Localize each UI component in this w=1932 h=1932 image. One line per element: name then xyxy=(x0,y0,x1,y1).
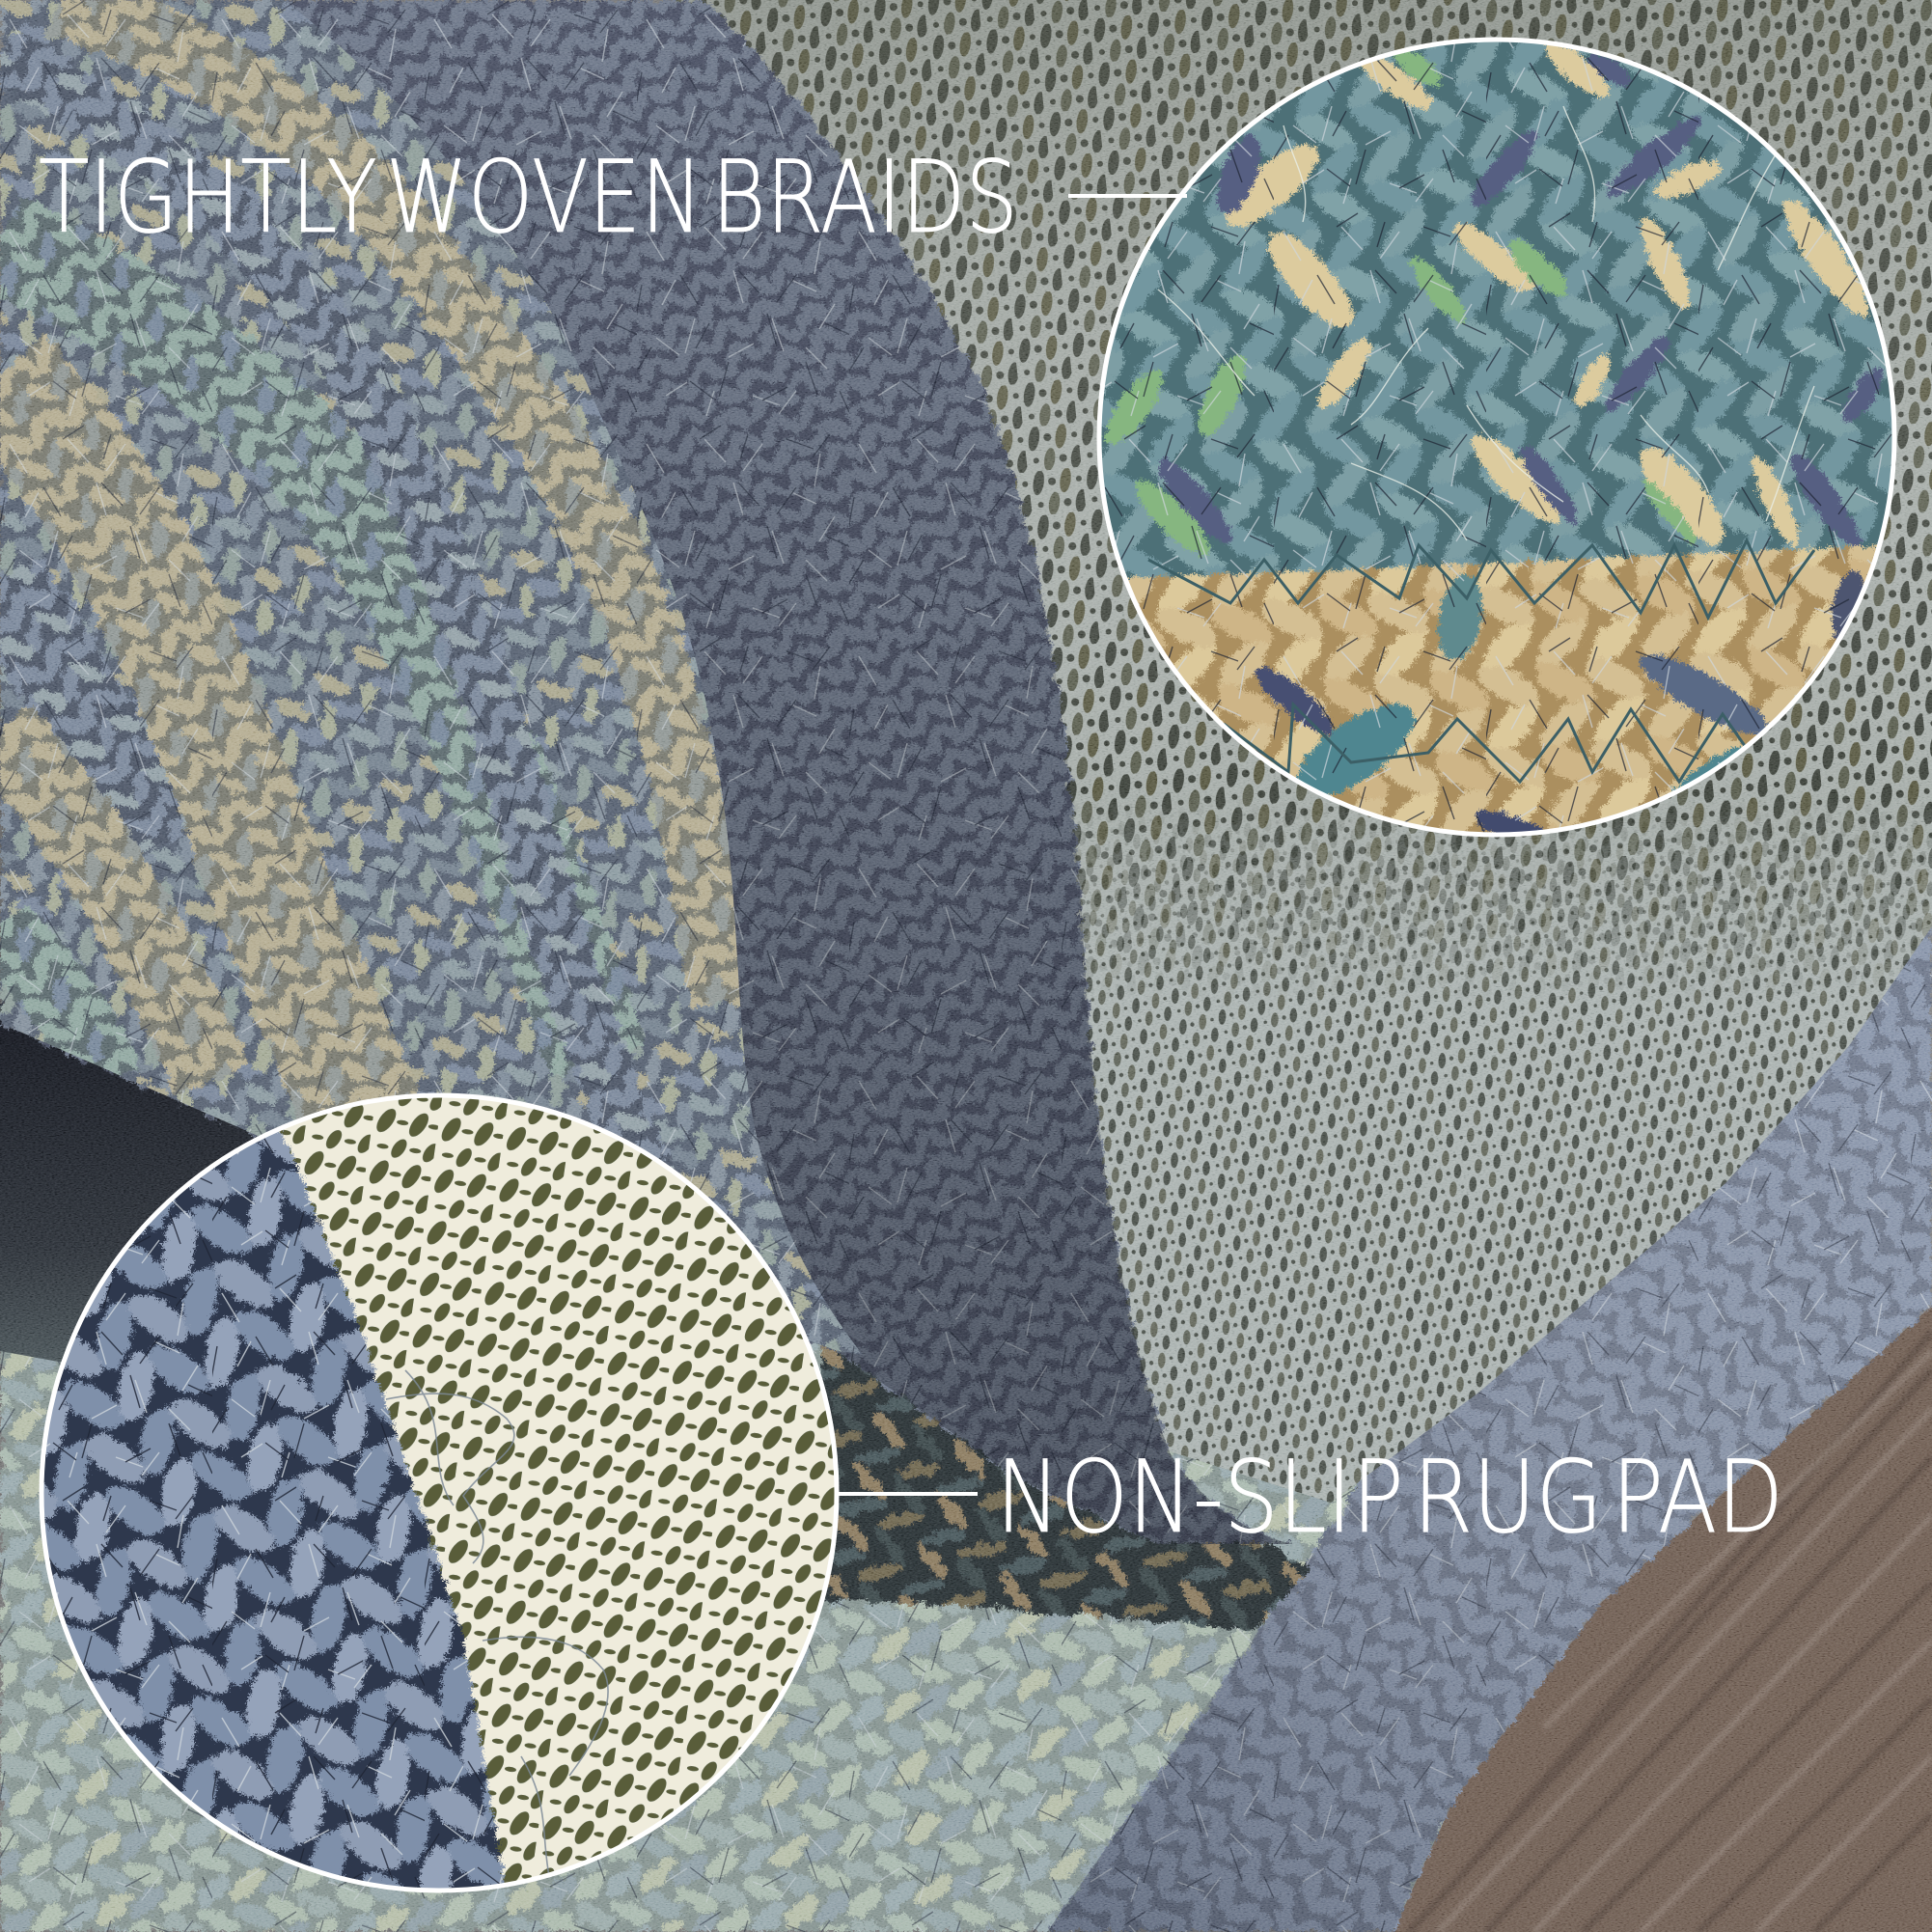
wood floor xyxy=(1390,1303,1932,1932)
rolled rug inner multicolour bands xyxy=(0,0,869,1370)
fibre hair on braid xyxy=(1090,29,1901,849)
heading label: tightly woven braids: TIGHTLY WOVEN BRAIDS xyxy=(39,140,1018,256)
grey non-slip pad with holes xyxy=(676,0,1932,1503)
lower right blue-grey rug border xyxy=(1047,869,1932,1932)
rolled rug dark outer band xyxy=(0,0,1293,1544)
stray white fibres xyxy=(1158,106,1814,540)
connector line: braids xyxy=(1068,194,1187,198)
zigzag stitches xyxy=(1148,540,1814,782)
lower rug pale braids xyxy=(0,1062,1448,1932)
heading label: non-slip rug pad: NON-SLIP RUG PAD xyxy=(996,1440,1783,1556)
indigo strands xyxy=(1149,47,1891,556)
teal braid rows xyxy=(1102,42,1891,832)
beige strands xyxy=(1214,34,1880,556)
dark shadow under rolled edge xyxy=(0,1004,318,1409)
stray fibres on mesh xyxy=(386,1370,608,1882)
tan braid rows xyxy=(1081,545,1911,849)
dark rug stitches under roll xyxy=(820,1332,1312,1631)
blue accents in tan rows xyxy=(1249,567,1870,879)
callout circle: braid close-up xyxy=(1081,29,1911,879)
white circle outline xyxy=(41,1095,837,1891)
connector line: pad xyxy=(839,1492,978,1496)
callout circle: pad close-up xyxy=(39,1062,840,1901)
olive tint on mesh holes xyxy=(39,1090,840,1901)
green strands xyxy=(1096,42,1701,564)
white circle outline xyxy=(1099,40,1894,835)
blue rug edge xyxy=(39,1062,506,1901)
cream pad mesh xyxy=(39,1090,840,1901)
